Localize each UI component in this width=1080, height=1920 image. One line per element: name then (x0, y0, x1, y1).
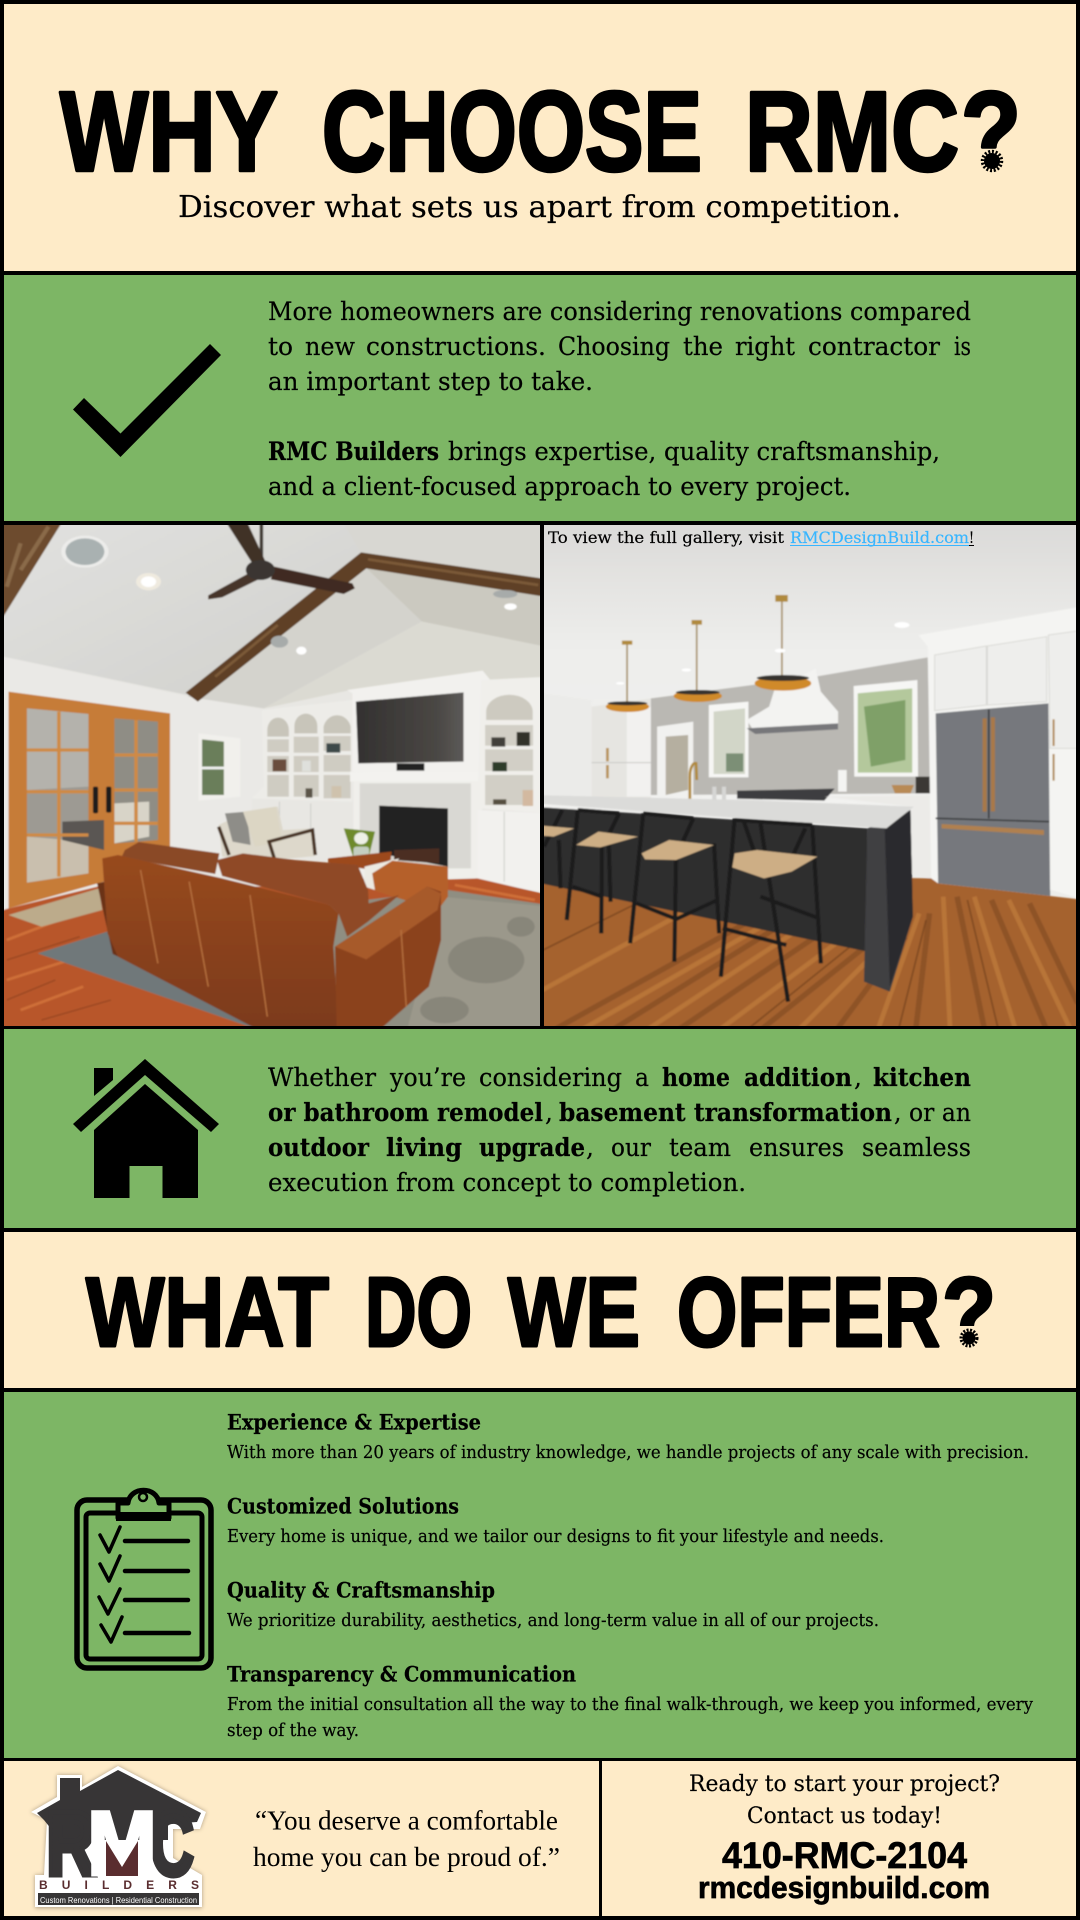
item: experience and expertise: Experience & Expertise (227, 1410, 481, 1434)
text block: services paragraph: , (545, 1098, 553, 1127)
text block: services paragraph: upgrade (479, 1133, 585, 1162)
panel: offerings (4, 1392, 1076, 1758)
logo: RMC Builders: M (87, 1793, 157, 1895)
text block: intro paragraph: RMC Builders (268, 437, 439, 466)
item: quality and craftsmanship: We prioritize durability, aesthetics, and long-term value in all of our projects. (227, 1610, 879, 1631)
text block: services paragraph: addition (744, 1063, 852, 1092)
quote (253, 1806, 560, 1872)
website: rmcdesignbuild.com (698, 1870, 990, 1905)
text block: services paragraph: living (386, 1133, 462, 1162)
text block: services paragraph: Whether (268, 1063, 376, 1092)
photo: kitchen (530, 510, 1080, 1043)
item: customized solutions: Every home is unique, and we tailor our designs to fit your lifestyle and needs. (227, 1526, 884, 1547)
text block: intro paragraph: and a client-focused approach to every project. (268, 472, 851, 501)
caption: gallery note (548, 528, 974, 547)
text block: intro paragraph: new (305, 332, 356, 361)
item: quality and craftsmanship (227, 1578, 879, 1631)
text block: services paragraph: our (611, 1133, 651, 1162)
title: Why Choose RMC?: ? (961, 68, 1021, 194)
text block: services paragraph (268, 1063, 971, 1197)
text block: intro paragraph: brings expertise, quality craftsmanship, (448, 437, 940, 466)
item: experience and expertise: With more than 20 years of industry knowledge, we handle projects of any scale with precision. (227, 1442, 1029, 1463)
icon: check mark (73, 344, 221, 457)
phone number: 410-RMC-2104 (722, 1835, 967, 1876)
panel: intro (4, 275, 1076, 521)
text block: services paragraph: , (854, 1063, 862, 1092)
item: customized solutions (227, 1494, 884, 1547)
call to action: Ready to start your project? (689, 1772, 1000, 1797)
heading: What do we offer?: DO (365, 1257, 472, 1367)
caption: gallery note: To view the full gallery, visit (548, 528, 785, 547)
panel: what do we offer header (4, 1232, 1076, 1388)
text block: services paragraph: home (662, 1063, 730, 1092)
item: transparency and communication: Transparency & Communication (227, 1662, 576, 1686)
text block: services paragraph: ensures (749, 1133, 844, 1162)
heading: What do we offer?: WE (508, 1257, 640, 1367)
text block: services paragraph: a (635, 1063, 649, 1092)
text block: intro paragraph: to (268, 332, 293, 361)
logo: RMC Builders: C (150, 1793, 194, 1895)
heading: What do we offer?: WHAT (86, 1257, 329, 1367)
panel: title header (4, 4, 1076, 271)
photo: living room (4, 525, 540, 1026)
text block: intro paragraph: an important step to take. (268, 367, 593, 396)
panel: contact (602, 1761, 1076, 1916)
text block: services paragraph: execution from concept to completion. (268, 1168, 746, 1197)
call to action: Contact us today! (747, 1804, 942, 1829)
text block: services paragraph: , or an (894, 1098, 971, 1127)
panel: services intro (4, 1029, 1076, 1228)
text block: intro paragraph: constructions. (366, 332, 546, 361)
text block: services paragraph: outdoor (268, 1133, 370, 1162)
heading: What do we offer?: ? (942, 1257, 996, 1367)
icon: house (73, 1059, 219, 1198)
title: Why Choose RMC?: WHY (60, 68, 278, 194)
text block: services paragraph: or bathroom remodel (268, 1098, 543, 1127)
text block: intro paragraph: More homeowners are considering renovations compared (268, 297, 971, 326)
caption: gallery note: RMCDesignBuild.com (790, 528, 969, 547)
icon: clipboard checklist (77, 1490, 211, 1668)
title: Why Choose RMC?: CHOOSE (322, 68, 702, 194)
quote: “You deserve a comfortable (255, 1806, 558, 1836)
subtitle: Discover what sets us apart from competition. (178, 190, 901, 225)
text block: intro paragraph: Choosing (558, 332, 670, 361)
heading: What do we offer? (86, 1257, 998, 1367)
heading: What do we offer?: OFFER (677, 1257, 940, 1367)
text block: services paragraph: team (669, 1133, 731, 1162)
text block: services paragraph: , (586, 1133, 594, 1162)
logo: RMC Builders (31, 1766, 206, 1908)
text block: services paragraph: kitchen (873, 1063, 971, 1092)
text block: services paragraph: basement transformation (559, 1098, 892, 1127)
title: Why Choose RMC?: RMC (745, 68, 959, 194)
item: quality and craftsmanship: Quality & Craftsmanship (227, 1578, 495, 1602)
item: transparency and communication (227, 1662, 1034, 1741)
text block: services paragraph: seamless (862, 1133, 971, 1162)
item: customized solutions: Customized Solutions (227, 1494, 459, 1518)
text block: intro paragraph: is (954, 332, 971, 361)
caption: gallery note: ! (969, 528, 974, 547)
title: Why Choose RMC? (60, 68, 1024, 194)
quote: home you can be proud of.” (253, 1842, 560, 1872)
text block: services paragraph: you’re (389, 1063, 466, 1092)
text block: intro paragraph: the (683, 332, 723, 361)
item: transparency and communication: From the initial consultation all the way to the final walk-through, we keep you informed, every (227, 1694, 1034, 1715)
text block: intro paragraph (268, 297, 971, 501)
logo: RMC Builders: BUILDERS (39, 1878, 199, 1892)
item: experience and expertise (227, 1410, 1029, 1463)
text block: intro paragraph: contractor (808, 332, 940, 361)
text block: services paragraph: considering (479, 1063, 622, 1092)
logo: RMC Builders: R (46, 1793, 96, 1895)
text block: intro paragraph: right (735, 332, 795, 361)
item: transparency and communication: step of the way. (227, 1720, 359, 1741)
call to action (689, 1772, 1000, 1829)
logo: RMC Builders: Custom Renovations | Residential Construction (40, 1895, 197, 1905)
panel: footer left (4, 1761, 599, 1916)
